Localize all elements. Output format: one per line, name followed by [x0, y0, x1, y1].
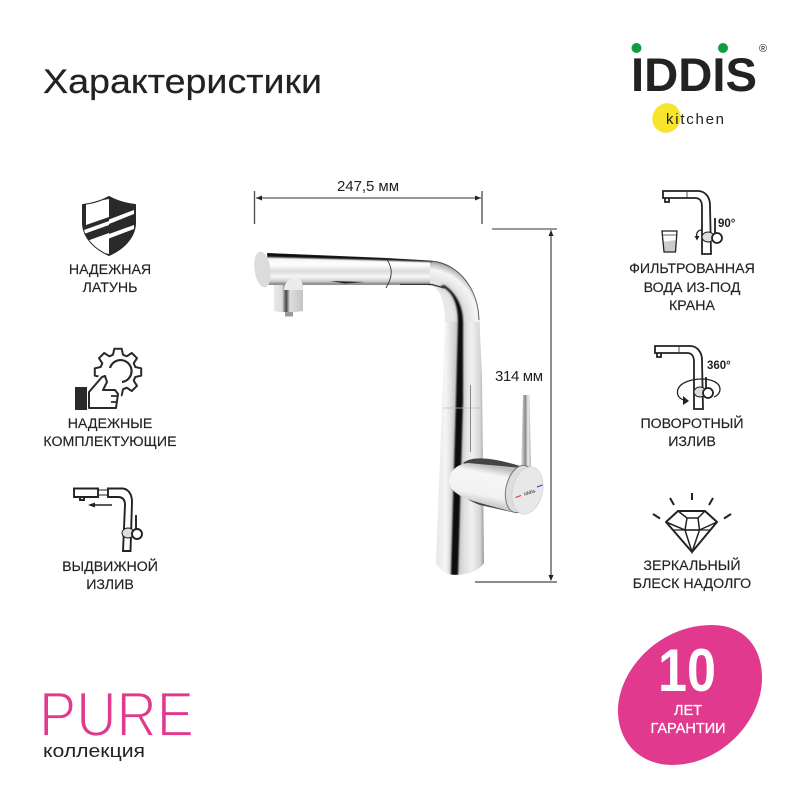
icon text: 90 degrees: 90°: [718, 218, 736, 230]
badge text: ЛЕТ: [674, 703, 702, 719]
label: shine: БЛЕСК НАДОЛГО: [633, 576, 751, 592]
badge number: 10: [658, 637, 716, 704]
logo yellow blob: [647, 98, 686, 138]
faucet illustration: [252, 250, 548, 582]
label: pull-out: ИЗЛИВ: [86, 577, 134, 593]
aerator: [274, 285, 303, 316]
badge text: ГАРАНТИИ: [650, 721, 726, 737]
feature: filtered water: [629, 191, 755, 314]
logo green dots: [632, 43, 728, 53]
icon: diamond: [653, 493, 731, 552]
icon: gear and thumb: [75, 349, 141, 410]
logo kitchen word: kitchen: [666, 111, 724, 128]
feature: brass shield: [69, 197, 151, 296]
height dimension: [475, 229, 557, 582]
logo registered mark: ®: [759, 43, 767, 55]
icon: shield: [83, 197, 135, 255]
lever: [521, 395, 531, 470]
title: Характеристики: [43, 63, 322, 101]
logo wordmark: IDDIS: [631, 48, 757, 101]
warranty badge: [618, 625, 762, 765]
spout end cap: [252, 251, 273, 288]
feature: reliable components: [43, 349, 177, 450]
feature: swivel spout: [640, 346, 744, 450]
feature: mirror shine: [633, 493, 751, 592]
width dimension: [254, 178, 482, 224]
icon: faucet 360 degrees: [655, 346, 720, 409]
label: brass: НАДЕЖНАЯ: [69, 262, 151, 278]
collection word PURE: PURE: [39, 680, 194, 750]
label: brass: ЛАТУНЬ: [83, 280, 137, 296]
label: swivel: ИЗЛИВ: [668, 434, 716, 450]
handle ring: [501, 462, 539, 516]
feature: pull-out spout: [62, 488, 158, 593]
handle body: [449, 463, 522, 513]
logo: IDDIS kitchen: [631, 43, 767, 138]
width label: 247,5 мм: [337, 178, 399, 195]
label: filtered water: ВОДА ИЗ-ПОД: [644, 280, 741, 296]
label: filtered water: КРАНА: [669, 298, 716, 314]
cap marks: iddis: [523, 488, 536, 498]
icon: faucet 90 degrees and glass: [662, 191, 722, 254]
badge shape: [618, 625, 762, 765]
cap marks: [516, 485, 542, 498]
spout and body: [260, 250, 490, 582]
pull-out seam: [386, 258, 391, 288]
label: shine: ЗЕРКАЛЬНЫЙ: [643, 556, 741, 574]
height label: 314 мм: [495, 368, 543, 385]
label: components: НАДЕЖНЫЕ: [68, 416, 152, 432]
label: components: КОМПЛЕКТУЮЩИЕ: [43, 434, 177, 450]
icon text: 360 degrees: 360°: [707, 360, 731, 372]
collection caption: коллекция: [43, 740, 145, 761]
label: filtered water: ФИЛЬТРОВАННАЯ: [629, 261, 755, 277]
collection name: [39, 680, 194, 761]
label: swivel: ПОВОРОТНЫЙ: [640, 414, 744, 432]
icon: pull-out faucet: [74, 488, 142, 551]
label: pull-out: ВЫДВИЖНОЙ: [62, 557, 158, 575]
handle cap: [507, 464, 548, 517]
aerator dome: [284, 278, 303, 290]
body guide line: [470, 385, 472, 452]
handle collars: [463, 458, 522, 513]
